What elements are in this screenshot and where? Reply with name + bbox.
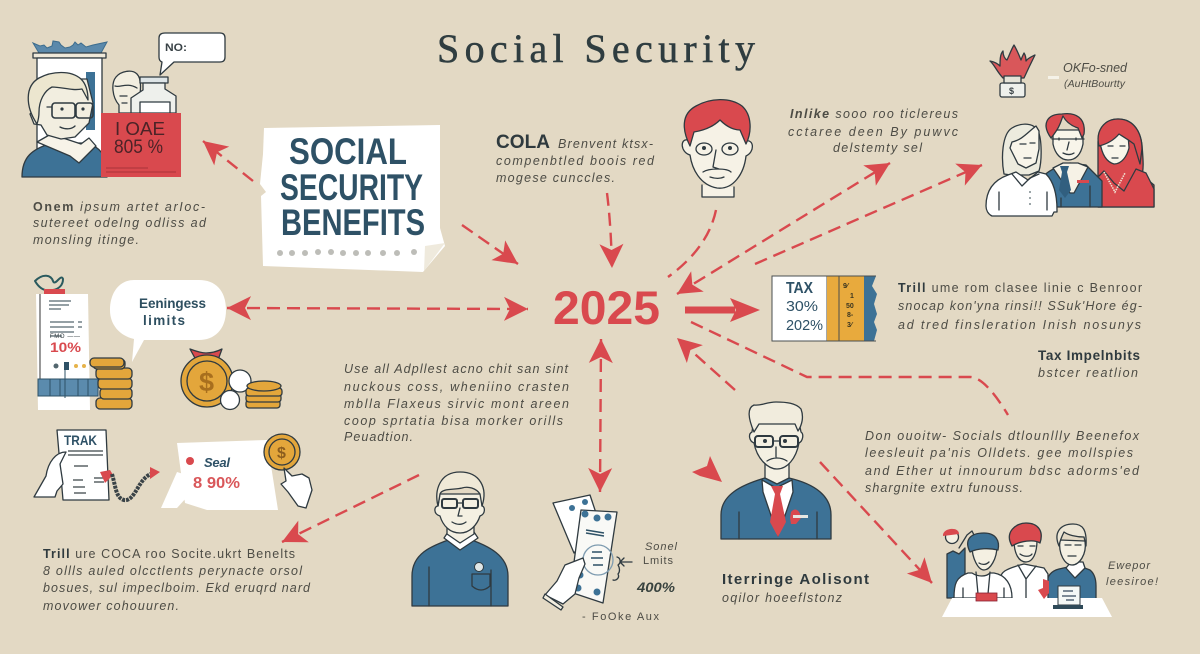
illustration: tax ticket: 8- (847, 312, 854, 319)
text block: tax: ad tred finsleration Inish nosunys (898, 318, 1141, 332)
illustration: man in blue sweater (412, 472, 508, 606)
title: Social Security (437, 26, 755, 71)
white card: Social Security Benefits: SECURITY (280, 167, 423, 208)
text block: COLA: COLA (496, 132, 550, 153)
label: group note: leesiroe! (1106, 576, 1158, 588)
icon: red-haired face (682, 100, 752, 197)
label: social limits note: - FoOke Aux (582, 611, 660, 623)
icon: money bag with coins (181, 349, 282, 410)
speech bubble: NO: (165, 42, 187, 54)
arrow: card to top-left illustration (203, 141, 253, 181)
text block: inlike: Inlike sooo roo ticlereus (790, 107, 958, 121)
text block: center paragraph: mblla Flaxeus sirvic mont areen (344, 397, 569, 411)
text block: top left (33, 200, 207, 247)
illustration: tax ticket: TAX (786, 280, 813, 297)
text block: advisor caption: oqilor hoeeflstonz (722, 591, 843, 605)
text block: tax: snocap kon'yna rinsi!! SSuk'Hore ég- (898, 299, 1142, 313)
box label: 805 % (114, 137, 163, 158)
text block: bottom left: 8 ollls auled olcctlents perynacte orsol (43, 564, 303, 578)
text block: top left: sutereet odelng odliss ad (33, 216, 207, 230)
arrow: COLA to 2025 (607, 193, 612, 268)
text block: tax impelnbits: bstcer reatlion (1038, 366, 1138, 380)
central year: 2025 (553, 281, 660, 334)
text block: COLA: Brenvent ktsx- (558, 137, 653, 151)
text block: advisor caption: Iterringe Aolisont (722, 571, 869, 588)
text block: bottom left (43, 547, 311, 613)
box label: I OAE (115, 119, 165, 139)
label: social limits note: 400% (636, 579, 676, 595)
box label (114, 119, 165, 158)
text block: inlike (788, 107, 959, 155)
text block: center paragraph (344, 362, 569, 444)
arrow: 2025 vertical (600, 339, 601, 492)
text block: lower right (865, 429, 1140, 495)
illustration: older man at building with jar (22, 33, 225, 177)
text block: inlike: delstemty sel (833, 141, 923, 155)
arrow: advisor to 2025 (677, 338, 735, 390)
text block: top left: monsling itinge. (33, 233, 139, 247)
arrow: 2025 to lower text (691, 322, 1008, 415)
card: seal 90%: 8 90% (193, 475, 240, 492)
text block: top left: Onem ipsum artet arIoc- (33, 200, 205, 214)
speech bubble: earnings limits: Eeningess (139, 296, 206, 311)
text block: center paragraph: Peuadtion. (344, 430, 413, 444)
text block: center paragraph: coop sprtatia bisa morker orills (344, 414, 563, 428)
speech bubble: earnings limits: limits (143, 313, 185, 328)
icon: flame with money jar (990, 45, 1035, 97)
label: flame note (1048, 61, 1128, 90)
label: flame note: OKFo-sned (1063, 61, 1128, 75)
text block: bottom left: movower cohouuren. (43, 599, 179, 613)
arrow: card to 2025 (462, 225, 518, 264)
arrow: to group (820, 462, 932, 583)
arrow: to bottom left text (282, 475, 419, 542)
arrow: face to 2025 (668, 210, 716, 277)
label: social limits note: Lmits (643, 555, 674, 567)
illustration: TRAK document with chain (34, 430, 160, 500)
white card: Social Security Benefits: SOCIAL (289, 131, 407, 172)
arrow: 2025 to tax (685, 298, 760, 322)
illustration: earnings document and coins: FMO —— (50, 334, 80, 340)
illustration: earnings document and coins (35, 276, 132, 410)
text block: center paragraph: Use all Adpllest acno chit san sint (344, 362, 569, 376)
illustration: tax ticket: 3⁄ (847, 322, 854, 329)
illustration: earnings document and coins: 10% (50, 339, 82, 355)
text block: inlike: cctaree deen By puwvc (788, 125, 959, 139)
arrowhead: near advisor (692, 456, 722, 482)
arrow: earnings limits to 2025 (227, 308, 528, 309)
text block: lower right: Don ouoitw- Socials dtlounllly Beenefox (865, 429, 1140, 443)
text block: lower right: shargnite extru funouss. (865, 481, 1023, 495)
text block: COLA: compenbtled boois red (496, 154, 655, 168)
text block: tax: Trill ume rom clasee linie c Benroor (898, 281, 1142, 295)
illustration: group at table (942, 523, 1112, 617)
text block: tax (898, 281, 1142, 332)
illustration: three people (986, 114, 1154, 216)
illustration: tax ticket: 1 (850, 293, 854, 300)
illustration: tax ticket: 9⁄ (843, 283, 850, 290)
icon: flame with money jar: $ (1009, 86, 1014, 96)
text block: COLA (496, 132, 655, 185)
white card: Social Security Benefits (260, 125, 445, 272)
illustration: hand with banknotes (543, 495, 632, 610)
card: seal 90%: $ (277, 445, 286, 462)
illustration: tax ticket: 202% (786, 317, 823, 334)
speech bubble (159, 33, 225, 75)
text block: lower right: and Ether ut innourum bdsc adorms'ed (865, 464, 1140, 478)
text block: COLA: mogese cunccles. (496, 171, 615, 185)
speech bubble: earnings limits (110, 280, 226, 362)
text block: advisor caption (722, 571, 869, 605)
arrow: 2025 to inlike text (677, 163, 890, 294)
illustration: TRAK document with chain: TRAK (64, 432, 97, 448)
text block: tax impelnbits (1038, 348, 1140, 380)
label: flame note: (AuHtBourtty (1064, 78, 1126, 90)
illustration: tax ticket: 30% (786, 298, 818, 315)
illustration: tax ticket: 50 (846, 303, 854, 310)
text block: bottom left: bosues, sul impeclboim. Ekd eruqrd nard (43, 581, 311, 595)
white card: Social Security Benefits: BENEFITS (281, 202, 425, 243)
illustration: tax ticket (772, 276, 877, 341)
label: group note: Ewepor (1108, 560, 1151, 572)
label: social limits note: Sonel (645, 541, 678, 553)
card: seal 90% (161, 434, 312, 510)
arrow: 2025 to trio (755, 165, 982, 264)
text block: bottom left: Trill ure COCA roo Socite.ukrt Benelts (43, 547, 295, 561)
icon: money bag with coins: $ (199, 367, 214, 397)
card: seal 90%: Seal (204, 455, 230, 470)
label: social limits note (582, 541, 678, 623)
illustration: advisor in suit (721, 402, 831, 539)
text block: tax impelnbits: Tax Impelnbits (1038, 348, 1140, 363)
text block: center paragraph: nuckous coss, wheniino crasten (344, 380, 569, 394)
label: group note (1106, 560, 1158, 588)
text block: lower right: leesleuit pa'nis Olldets. gee mollspies (865, 446, 1133, 460)
